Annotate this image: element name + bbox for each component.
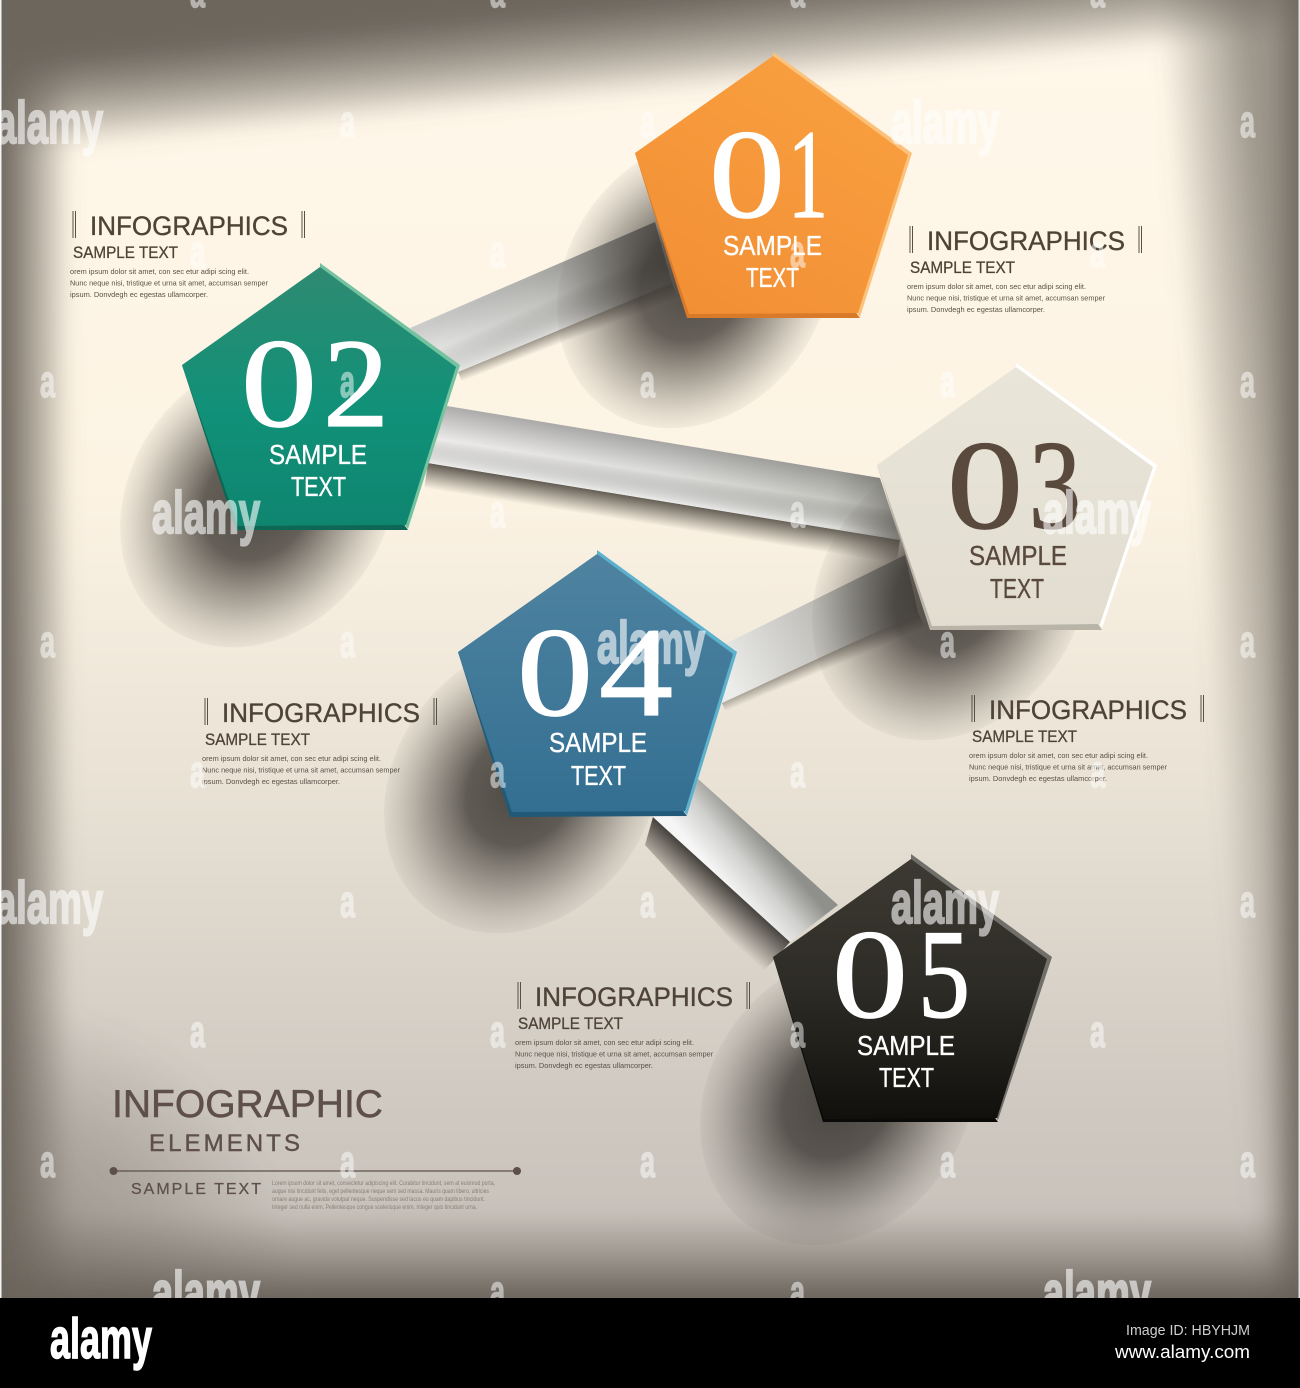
number 02: 0 xyxy=(241,314,317,454)
watermarks: a xyxy=(940,356,956,407)
text block: infographics 02: INFOGRAPHICS xyxy=(90,211,288,241)
text block: infographics 04: ipsum. Donvdegh ec egestas ullamcorper. xyxy=(202,777,340,786)
text block: infographics 02: orem ipsum dolor sit amet, con sec etur adipi scing elit. xyxy=(70,267,249,276)
title block: infographic elements: augue nisi tincidunt felis, eget pellentesque neque sem sed massa. Mauris quam libero, ultricies xyxy=(272,1189,489,1195)
text block: infographics 04: INFOGRAPHICS xyxy=(222,698,420,728)
watermarks: a xyxy=(1240,876,1256,927)
watermarks: alamy xyxy=(152,1260,260,1326)
watermarks: alamy xyxy=(1043,480,1151,546)
label: sample text xyxy=(269,439,367,502)
watermarks: a xyxy=(1240,96,1256,147)
text block: infographics 01: Nunc neque nisi, tristique et urna sit amet, accumsan semper xyxy=(907,294,1106,302)
watermarks: a xyxy=(190,1006,206,1057)
watermarks: a xyxy=(40,356,56,407)
watermarks: a xyxy=(640,1136,656,1187)
text block: infographics 03 xyxy=(969,695,1204,783)
watermarks: alamy xyxy=(0,870,103,936)
watermarks: a xyxy=(340,616,356,667)
number 01: 1 xyxy=(788,105,828,245)
panel: pentagon 05 xyxy=(773,854,1052,1122)
title block: infographic elements: ELEMENTS xyxy=(149,1130,300,1157)
label: sample text: SAMPLE xyxy=(269,439,367,470)
text block: infographics 01: ipsum. Donvdegh ec egestas ullamcorper. xyxy=(907,305,1045,314)
text block: infographics 05: ipsum. Donvdegh ec egestas ullamcorper. xyxy=(515,1061,653,1070)
pentagon cast shadows xyxy=(63,81,1145,1300)
text block: infographics 03: Nunc neque nisi, tristique et urna sit amet, accumsan semper xyxy=(969,762,1168,772)
number 05: 5 xyxy=(918,905,970,1045)
label: sample text xyxy=(857,1030,955,1093)
watermarks: a xyxy=(790,1006,806,1057)
number 05: 0 xyxy=(832,905,908,1045)
connector bar 01 to 02 xyxy=(410,222,672,372)
panel: pentagon 03 xyxy=(877,363,1157,630)
text block: infographics 03: orem ipsum dolor sit amet, con sec etur adipi scing elit. xyxy=(969,751,1148,760)
label: sample text xyxy=(549,727,647,791)
title block: infographic elements: Lorem ipsum dolor sit amet, consectetur adipiscing elit. Curabitur tincidunt, sem at euismod porta, xyxy=(272,1181,495,1187)
watermarks: a xyxy=(1090,1006,1106,1057)
watermarks: alamy xyxy=(597,610,705,676)
number 04: 0 xyxy=(517,603,593,743)
number 04: 4 xyxy=(599,603,673,743)
watermarks: a xyxy=(790,486,806,537)
watermarks: a xyxy=(490,486,506,537)
panel: pentagon 02 xyxy=(182,263,460,530)
watermarks: a xyxy=(490,226,506,277)
number 03: 3 xyxy=(1029,416,1081,556)
text block: infographics 02 xyxy=(70,211,304,299)
watermarks: a xyxy=(340,96,356,147)
number 03 xyxy=(947,416,1081,556)
text block: infographics 04: orem ipsum dolor sit amet, con sec etur adipi scing elit. xyxy=(202,754,381,763)
connector bar shadows xyxy=(424,283,924,973)
label: sample text: TEXT xyxy=(746,262,799,293)
label: sample text: TEXT xyxy=(291,471,346,502)
watermarks: a xyxy=(790,746,806,797)
watermarks: a xyxy=(190,746,206,797)
watermarks: a xyxy=(340,1136,356,1187)
text block: infographics 03: ipsum. Donvdegh ec egestas ullamcorper. xyxy=(969,774,1107,783)
number 01: 0 xyxy=(709,105,785,245)
watermarks: a xyxy=(490,1266,506,1317)
label: sample text: SAMPLE xyxy=(549,727,647,758)
watermarks: alamy xyxy=(0,90,103,156)
watermarks: alamy xyxy=(891,90,999,156)
watermarks: a xyxy=(340,356,356,407)
text block: infographics 05: SAMPLE TEXT xyxy=(518,1014,623,1033)
watermarks: a xyxy=(40,1136,56,1187)
label: sample text: TEXT xyxy=(571,760,626,791)
text block: infographics 04: Nunc neque nisi, tristique et urna sit amet, accumsan semper xyxy=(202,766,401,774)
text block: infographics 05: Nunc neque nisi, tristique et urna sit amet, accumsan semper xyxy=(515,1050,714,1058)
watermarks: a xyxy=(640,876,656,927)
footer bar xyxy=(0,1298,1300,1388)
connector bar 02 to 03 xyxy=(428,406,900,540)
text block: infographics 01: orem ipsum dolor sit amet, con sec etur adipi scing elit. xyxy=(907,282,1086,291)
label: sample text: TEXT xyxy=(879,1062,934,1093)
label: sample text: SAMPLE xyxy=(857,1030,955,1061)
text block: infographics 01: INFOGRAPHICS xyxy=(927,226,1125,256)
panel: pentagon 04 xyxy=(458,550,737,817)
watermarks: a xyxy=(1090,226,1106,277)
text block: infographics 05: orem ipsum dolor sit amet, con sec etur adipi scing elit. xyxy=(515,1038,694,1047)
label: sample text: TEXT xyxy=(990,573,1044,604)
text block: infographics 01 xyxy=(907,226,1142,314)
watermarks: a xyxy=(940,1136,956,1187)
text block: infographics 04 xyxy=(202,698,436,786)
label: sample text: SAMPLE xyxy=(969,540,1067,571)
label: sample text xyxy=(969,540,1067,604)
title block: infographic elements: Integer sed nulla enim. Pellentesque congue scelerisque enim. Integer quis tincidunt urna. xyxy=(272,1205,477,1211)
image id: Image ID: HBYHJM xyxy=(1126,1322,1250,1339)
text block: infographics 05 xyxy=(515,982,750,1070)
text block: infographics 05: INFOGRAPHICS xyxy=(535,982,733,1012)
watermarks: a xyxy=(640,96,656,147)
watermarks: a xyxy=(490,1006,506,1057)
watermarks: a xyxy=(40,616,56,667)
watermarks: a xyxy=(1240,1136,1256,1187)
number 01 xyxy=(709,105,828,245)
watermarks: a xyxy=(190,226,206,277)
connector bar 03 to 04 xyxy=(722,555,918,703)
text block: infographics 02: ipsum. Donvdegh ec egestas ullamcorper. xyxy=(70,290,208,299)
title block: infographic elements: ornare augue ac, gravida volutpat neque. Suspendisse sed lacus eu quam dapibus tincidunt. xyxy=(272,1197,485,1203)
watermarks: a xyxy=(1240,616,1256,667)
text block: infographics 02: SAMPLE TEXT xyxy=(73,243,178,262)
label: sample text: SAMPLE xyxy=(723,230,822,261)
watermarks: a xyxy=(790,226,806,277)
number 02 xyxy=(241,314,389,454)
watermarks: a xyxy=(940,616,956,667)
footer logo: alamy xyxy=(50,1307,152,1371)
title block: infographic elements: SAMPLE TEXT xyxy=(131,1181,261,1198)
title block: infographic elements xyxy=(110,1083,521,1211)
number 03: 0 xyxy=(947,416,1023,556)
connector bar 04 to 05 xyxy=(653,778,838,942)
text block: infographics 03: INFOGRAPHICS xyxy=(989,695,1187,725)
text block: infographics 04: SAMPLE TEXT xyxy=(205,730,310,749)
watermarks: a xyxy=(790,1266,806,1317)
text block: infographics 02: Nunc neque nisi, tristique et urna sit amet, accumsan semper xyxy=(70,278,269,288)
label: sample text xyxy=(723,230,822,293)
number 04 xyxy=(517,603,673,743)
text block: infographics 01: SAMPLE TEXT xyxy=(910,258,1015,277)
website: www.alamy.com xyxy=(1114,1342,1250,1362)
panel: pentagon 01 xyxy=(635,52,912,318)
text block: infographics 03: SAMPLE TEXT xyxy=(972,727,1077,746)
watermarks: alamy xyxy=(1043,1260,1151,1326)
watermarks: a xyxy=(1090,746,1106,797)
watermarks: a xyxy=(340,876,356,927)
watermarks: a xyxy=(640,356,656,407)
watermarks: alamy xyxy=(152,480,260,546)
watermarks: alamy xyxy=(891,870,999,936)
number 02: 2 xyxy=(323,314,389,454)
watermarks: a xyxy=(1240,356,1256,407)
title block: infographic elements: INFOGRAPHIC xyxy=(112,1083,383,1126)
number 05 xyxy=(832,905,970,1045)
watermarks: a xyxy=(490,746,506,797)
